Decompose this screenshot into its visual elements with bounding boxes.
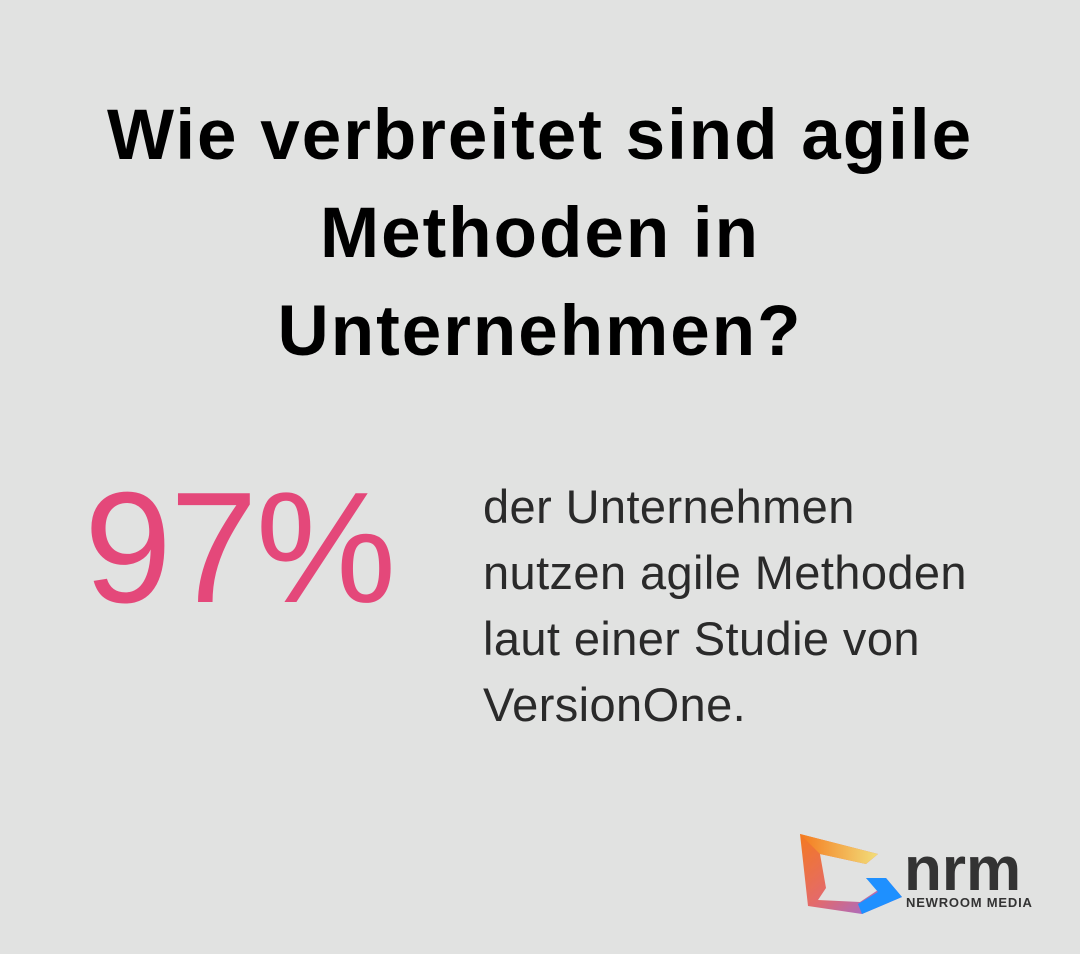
title: Methoden in xyxy=(320,194,760,273)
description text: der Unternehmen xyxy=(483,480,855,533)
description text: laut einer Studie von xyxy=(483,612,920,665)
logo: nrm newroom media: nrm xyxy=(904,835,1021,904)
title xyxy=(107,96,973,371)
description text xyxy=(483,480,967,731)
logo: nrm newroom media xyxy=(800,834,1033,914)
icon shape xyxy=(800,834,902,914)
title: Wie verbreitet sind agile xyxy=(107,96,973,175)
description text: VersionOne. xyxy=(483,678,746,731)
logo: nrm newroom media: NEWROOM MEDIA xyxy=(906,895,1033,910)
stat: 97%: 97% xyxy=(84,460,394,636)
title: Unternehmen? xyxy=(278,292,802,371)
description text: nutzen agile Methoden xyxy=(483,546,967,599)
